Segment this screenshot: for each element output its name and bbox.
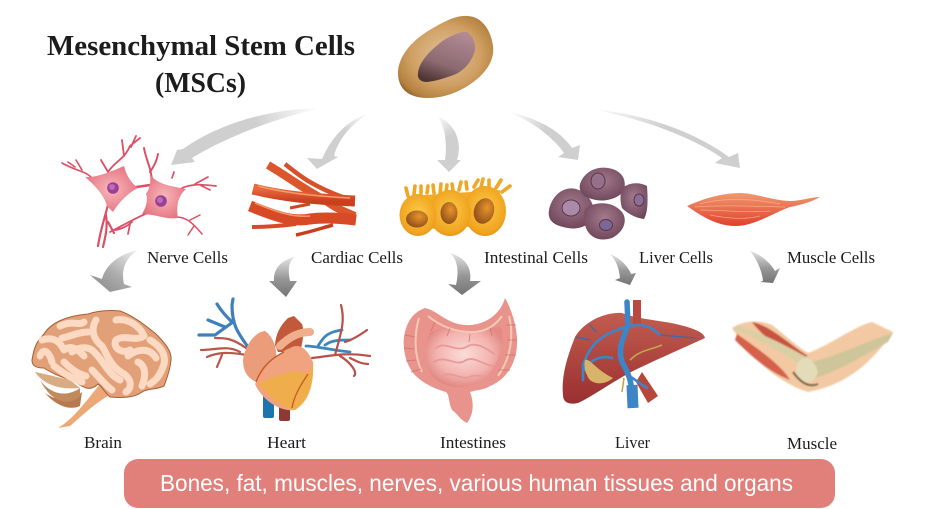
organ labels: Muscle — [787, 434, 837, 453]
organ labels: Brain — [84, 433, 122, 452]
organ labels: Heart — [267, 433, 306, 452]
organ: liver — [563, 300, 705, 408]
banner — [124, 459, 835, 508]
liver cells — [549, 168, 648, 240]
organ: heart — [199, 299, 370, 421]
intestinal cells — [400, 179, 510, 236]
cardiac cells — [250, 164, 356, 235]
title — [47, 31, 355, 99]
organ labels: Liver — [615, 433, 650, 452]
organ: intestines — [404, 298, 517, 423]
organ labels: Intestines — [440, 433, 506, 452]
nerve cells — [62, 136, 216, 247]
icon: mesenchymal stem cell — [398, 16, 493, 98]
cell type labels — [147, 248, 875, 267]
organ: muscle / elbow — [732, 322, 893, 392]
arrows: stem cell to cell types — [171, 108, 740, 172]
banner: Bones, fat, muscles, nerves, various human tissues and organs — [160, 470, 793, 496]
cell type labels: Nerve Cells — [147, 248, 228, 267]
muscle cell — [687, 193, 820, 226]
title: (MSCs) — [155, 68, 246, 99]
organ labels — [84, 433, 837, 453]
cell type labels: Muscle Cells — [787, 248, 875, 267]
title: Mesenchymal Stem Cells — [47, 31, 355, 62]
organ: brain — [32, 310, 171, 428]
cell type labels: Intestinal Cells — [484, 248, 588, 267]
cell type labels: Cardiac Cells — [311, 248, 403, 267]
arrows: cell types to organs — [90, 250, 780, 297]
cell type labels: Liver Cells — [639, 248, 713, 267]
